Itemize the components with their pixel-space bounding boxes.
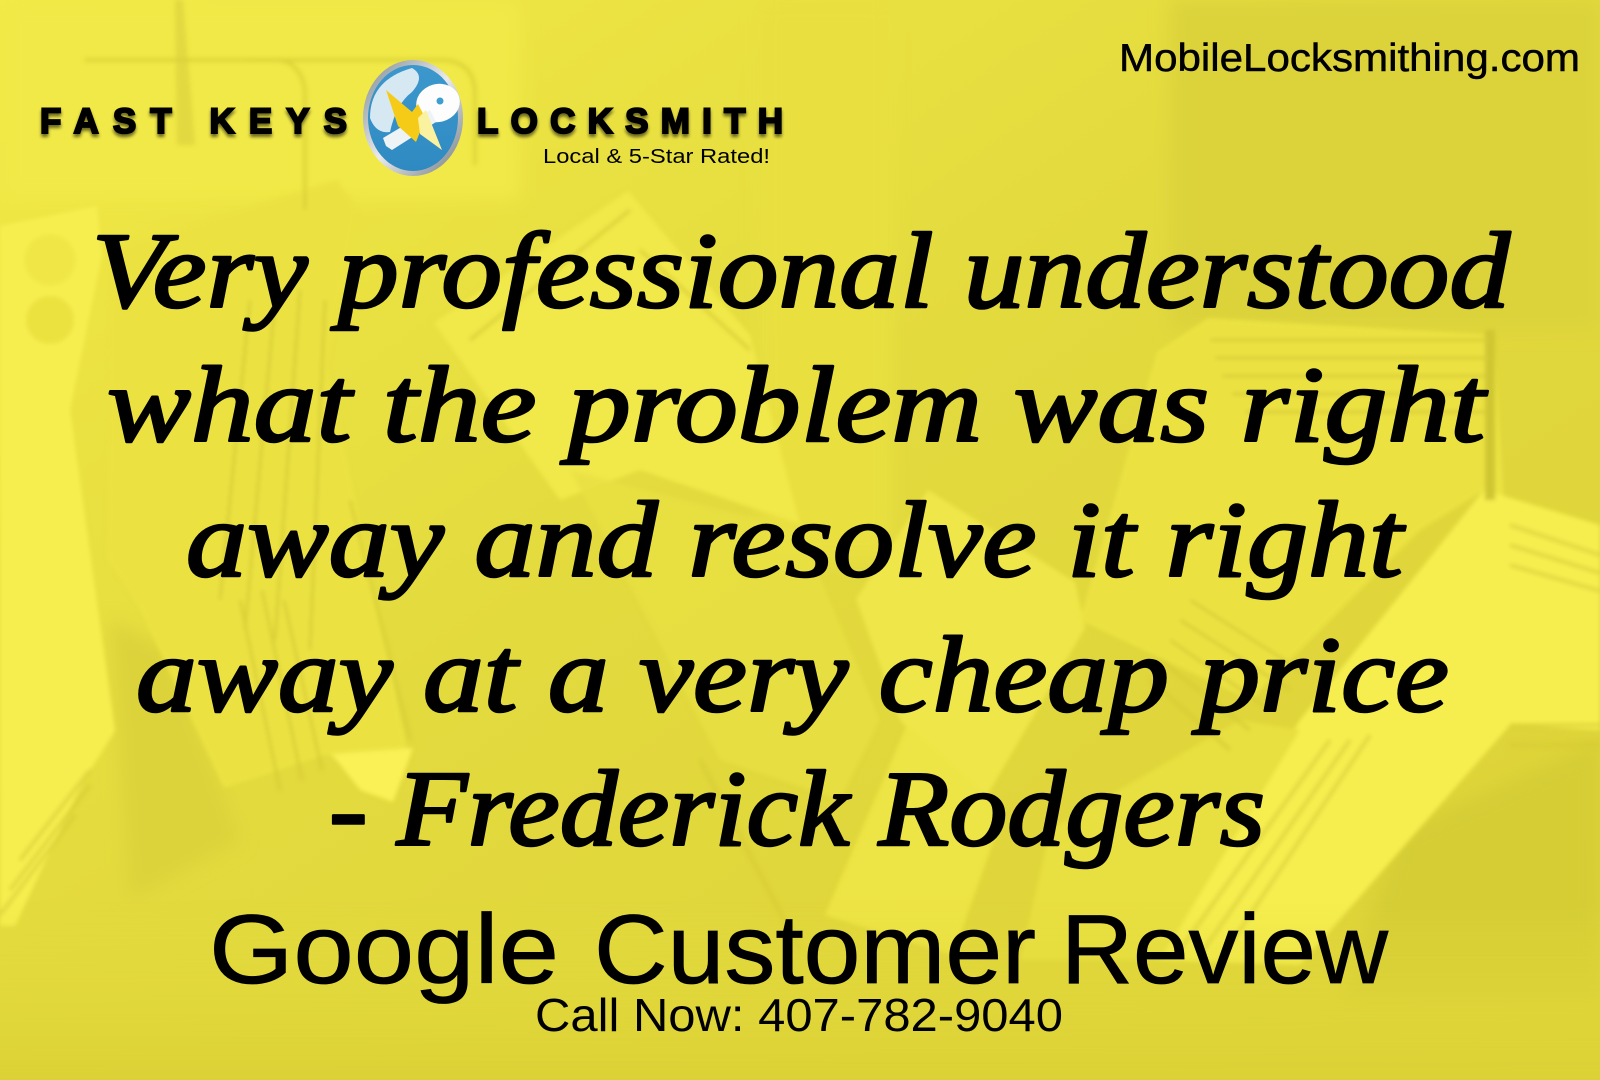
customer quote [92, 212, 1511, 869]
logo wordmark: Fast Keys: FAST KEYS [40, 105, 347, 144]
logo tagline: Local & 5-Star Rated! [543, 146, 770, 168]
customer quote: away and resolve it right [186, 481, 1406, 600]
review source heading: Review [1061, 894, 1389, 1004]
customer quote: away at a very cheap price [136, 616, 1449, 735]
logo wordmark: Locksmith: LOCKSMITH [477, 105, 783, 144]
customer quote: Very professional understood [92, 212, 1511, 331]
review source heading: Customer [594, 894, 1036, 1004]
logo wordmark: Locksmith: LOCKSMITH [477, 102, 783, 141]
customer quote: what the problem was right [107, 346, 1488, 465]
customer quote: - Frederick Rodgers [329, 750, 1265, 869]
logo: Fast Keys Locksmith [40, 60, 783, 176]
call to action phone number: Call Now: 407-782-9040 [535, 989, 1063, 1041]
review source heading [209, 894, 1389, 1004]
review source heading: Google [209, 894, 559, 1004]
website address: MobileLocksmithing.com [1119, 37, 1580, 80]
logo badge: key and lightning bolt [363, 60, 464, 176]
logo wordmark: Fast Keys: FAST KEYS [40, 102, 347, 141]
